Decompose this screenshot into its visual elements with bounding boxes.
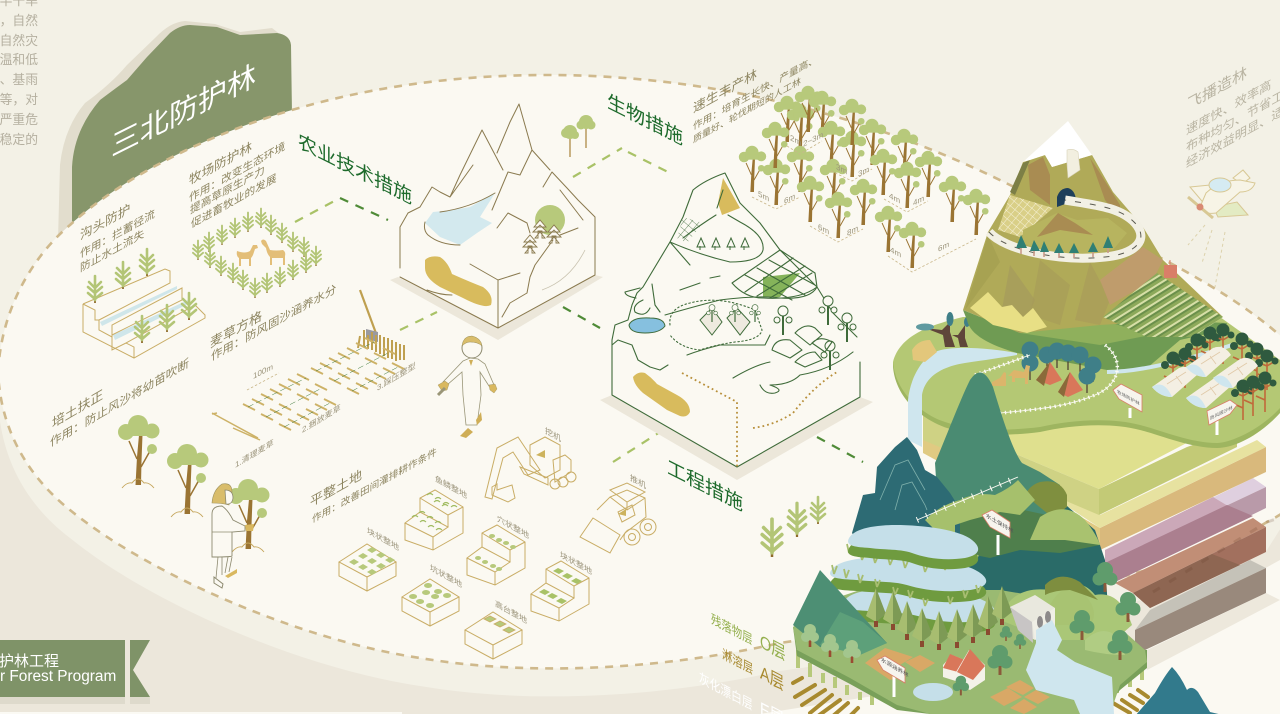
pine rows — [1161, 324, 1278, 392]
light hill — [1030, 509, 1100, 545]
cut-off intro paragraph: 等，对 — [0, 92, 38, 107]
cut-off intro paragraph: 严重危 — [0, 112, 38, 127]
net — [677, 217, 703, 243]
flying seeding text: 飞播造林 — [1187, 64, 1247, 114]
label: 作用：拦蓄径流 — [80, 206, 155, 261]
block: 块状整地 left — [339, 525, 399, 591]
cut-off intro paragraph: 温和低 — [0, 52, 38, 67]
teal mountain — [852, 437, 967, 545]
ground top — [793, 590, 1147, 714]
label: 防止水土流失 — [80, 226, 145, 275]
lower right cream ground — [760, 560, 1280, 714]
support sticks — [798, 650, 1142, 705]
pond — [913, 683, 953, 701]
straw bales: 1 — [212, 413, 260, 440]
spacing dimensions: 3m — [858, 164, 869, 179]
tall green mountain — [935, 372, 1060, 540]
block: 鱼鳞整地: 鱼鳞整地 — [435, 473, 467, 501]
spacing dimensions: 2m — [790, 132, 801, 147]
spacing dimensions: 5m — [758, 188, 769, 203]
label: 作用：改善田间灌排耕作条件 — [312, 445, 437, 526]
orange fields right — [990, 680, 1050, 714]
flying seeding text — [1186, 64, 1280, 171]
dotted soil lines — [682, 372, 837, 467]
yellow blob — [633, 372, 690, 416]
ellipse dashes through layers — [1153, 517, 1280, 592]
deep teal base — [960, 500, 1108, 625]
heading: 农业技术措施: 农业技术措施 — [298, 130, 412, 209]
brown layer — [1115, 518, 1266, 593]
title text: 三北防护林 — [111, 58, 256, 164]
yellow blob — [425, 256, 492, 306]
sign: 防风固沙林: 防风固沙林 — [1210, 404, 1233, 422]
label: 作用：防止风沙将幼苗吹断 — [50, 355, 189, 450]
spacing dimensions: 4m — [889, 190, 900, 205]
section: 平整土地 — [310, 425, 656, 659]
firs on ring road — [697, 238, 705, 250]
dimension: 100m — [247, 361, 279, 390]
river — [908, 348, 1017, 447]
icon: llamas in paddock — [992, 365, 1030, 386]
banner — [0, 640, 150, 704]
river — [1026, 620, 1114, 714]
step captions: 1.清理麦草 — [235, 436, 274, 470]
flying seeding text: 速度快、效率高 — [1186, 76, 1271, 138]
section: 麦草方格 — [210, 281, 416, 470]
bottom right blue mountain — [1135, 667, 1227, 714]
light round trees — [801, 624, 819, 647]
soil horizon labels: 残落物层 — [711, 611, 753, 648]
block: 穴状整地: 穴状整地 — [497, 513, 529, 541]
houses — [943, 649, 985, 690]
terraces — [830, 525, 995, 633]
cut-off intro paragraph: ，自然 — [0, 13, 38, 28]
inner slope — [1023, 213, 1127, 260]
decorative firs — [762, 497, 825, 557]
disc lip — [893, 362, 1280, 448]
spacing dimensions: 6m — [784, 191, 795, 206]
dead tree — [916, 312, 970, 347]
disc top — [893, 317, 1280, 443]
spacing dimensions: 3m — [836, 161, 847, 176]
section: 培土扶正 — [50, 355, 270, 588]
rock net — [998, 195, 1053, 237]
icon: woman planting — [212, 484, 254, 588]
orange layer — [1100, 447, 1266, 550]
orange fields left — [865, 648, 913, 680]
tents — [1036, 362, 1083, 397]
sign: 水源涵养林 — [877, 655, 909, 697]
icon: excavator: 挖机 — [545, 425, 561, 444]
sign: 水土保持林 — [982, 510, 1014, 555]
left green mountain — [793, 570, 887, 653]
soil horizon labels: 淋溶层 — [722, 645, 753, 678]
straw plot: 2 — [243, 374, 336, 430]
cut-off intro paragraph: 、基雨 — [0, 72, 38, 87]
block: 块状整地 right: 块状整地 — [560, 549, 592, 577]
label: 质量好、轮伐期短的人工林 — [693, 75, 801, 146]
label: 沟头防护 — [80, 201, 130, 243]
icon: excavator — [485, 425, 576, 502]
mountain road — [989, 200, 1141, 258]
tunnel — [1057, 188, 1076, 207]
dashed connectors — [295, 148, 863, 462]
upper disc — [893, 121, 1280, 448]
label: 牧场防护林 — [189, 139, 252, 188]
banner: 护林工程 — [0, 653, 59, 670]
spacing dimensions: 4m — [913, 193, 924, 208]
mountain body — [963, 155, 1223, 333]
heading: 工程措施: 工程措施 — [667, 456, 743, 516]
label: 作用：培育生长快、产量高、 — [693, 52, 818, 133]
label: 促进畜牧业的发展 — [191, 170, 277, 231]
ellipse panel shadow — [0, 400, 1280, 714]
lower island — [793, 525, 1148, 714]
label: 作用：改变生态环境 — [189, 139, 285, 205]
yellow foothills — [970, 292, 1047, 333]
red marker — [1169, 260, 1171, 265]
cut-off intro paragraph: 自然灾 — [0, 33, 38, 48]
spacing dimensions: 2~3m — [803, 129, 823, 149]
right stream — [1107, 345, 1232, 372]
label: 提高草原生产力 — [190, 163, 265, 217]
block: 高台整地: 高台整地 — [495, 598, 527, 626]
banner: r Forest Program — [0, 668, 116, 685]
mossy bush band — [960, 505, 1100, 558]
gully terrace block — [83, 269, 205, 358]
greenhouses — [772, 326, 832, 367]
soil horizon labels — [699, 611, 786, 714]
fence on ridge — [917, 477, 1018, 520]
cut-off intro paragraph: 稳定的 — [0, 132, 38, 147]
snow cap — [1023, 121, 1092, 167]
soil stripes — [793, 678, 1148, 714]
hay mound — [912, 340, 937, 362]
icon: rake and straw — [358, 290, 404, 361]
gray E layer — [1135, 560, 1266, 630]
trees — [118, 415, 270, 552]
icon: loader — [580, 472, 656, 553]
sign: 水源涵养林: 水源涵养林 — [881, 655, 909, 679]
front pines — [1231, 372, 1276, 420]
plantation — [1103, 273, 1223, 337]
icon: seeding plane — [1188, 170, 1255, 287]
icon: llamas — [237, 240, 285, 266]
label: 速生丰产林 — [693, 67, 757, 116]
straw plot: 3 — [311, 338, 404, 394]
fenced tents — [670, 300, 762, 350]
triangular firs — [866, 586, 1012, 650]
green slab — [923, 380, 1240, 489]
section: 速生丰产林 — [693, 52, 990, 272]
soil horizon labels: A层 — [760, 661, 784, 695]
block: 坑状整地: 坑状整地 — [430, 562, 462, 590]
section: 沟头防护 — [80, 201, 205, 358]
spacing dimensions: 8m — [847, 223, 858, 238]
block: 穴状整地 — [467, 513, 529, 585]
outlines — [400, 104, 595, 328]
dimension: 100m: 100m — [253, 361, 273, 381]
teal tree grove — [1022, 342, 1102, 393]
spacing dimensions: 6m — [938, 239, 949, 254]
heading: 生物措施: 生物措施 — [607, 90, 683, 150]
white fence — [975, 345, 1117, 415]
lake — [425, 193, 495, 245]
green trees on ground — [953, 562, 1140, 695]
block: biological measures mountain — [600, 173, 873, 480]
block: 高台整地 — [465, 598, 527, 659]
soil horizon labels: O层 — [760, 630, 786, 665]
icon: loader: 推机 — [630, 472, 646, 491]
pond — [629, 318, 665, 333]
plantation trees — [739, 86, 990, 268]
sign: 防风固沙林 — [1207, 400, 1237, 435]
sign: 水土保持林: 水土保持林 — [986, 511, 1014, 535]
mountain facets — [965, 157, 1163, 333]
green sun circle — [535, 205, 565, 235]
dam — [1010, 595, 1055, 643]
label: 平整土地 — [310, 466, 362, 510]
man with scroll — [438, 336, 497, 438]
shadow — [1147, 593, 1280, 670]
mountain skirt — [963, 310, 1227, 370]
block: agricultural technique mountain — [390, 104, 603, 340]
spacing dimensions: 6m — [818, 221, 829, 236]
field patch — [763, 273, 800, 297]
outlines — [612, 173, 860, 467]
block: 块状整地 right — [531, 549, 592, 621]
soil horizon labels: 灰化漂白层 — [699, 669, 753, 713]
olive mound — [1025, 481, 1067, 518]
greenhouses — [1152, 367, 1197, 397]
block: 鱼鳞整地 — [405, 473, 467, 550]
yellow peak — [718, 178, 740, 215]
soil layer stack — [923, 380, 1280, 670]
step captions — [235, 359, 416, 470]
label — [189, 139, 285, 231]
step captions: 3.踩压整型 — [377, 359, 416, 393]
title plaque — [58, 21, 292, 240]
label: 培土扶正 — [52, 386, 103, 431]
purple layer — [1105, 478, 1266, 563]
label: 麦草方格 — [210, 307, 262, 351]
ground lip — [793, 627, 1147, 714]
light hills on ground — [1000, 584, 1132, 640]
cut-off intro paragraph — [0, 0, 38, 147]
sapling ring — [193, 209, 321, 298]
label: 作用：防风固沙涵养水分 — [211, 281, 336, 364]
sign: 牧场防护林: 牧场防护林 — [1117, 388, 1140, 407]
lower mountains — [852, 372, 1108, 625]
step captions: 2.捆放麦草 — [302, 401, 341, 435]
upland bushes — [925, 480, 1035, 535]
section: 牧场防护林 — [189, 139, 321, 298]
spacing dimensions: 4m — [890, 244, 901, 259]
block: 块状整地 left: 块状整地 — [367, 525, 399, 553]
block: 坑状整地 — [402, 562, 462, 626]
crop grid — [732, 250, 817, 300]
bottom edge highlight — [0, 712, 402, 714]
small trees by 生物措施 — [561, 115, 596, 157]
teal firs — [1016, 235, 1113, 253]
spacing dimensions — [752, 129, 976, 272]
sign: 牧场防护林 — [1113, 384, 1142, 418]
